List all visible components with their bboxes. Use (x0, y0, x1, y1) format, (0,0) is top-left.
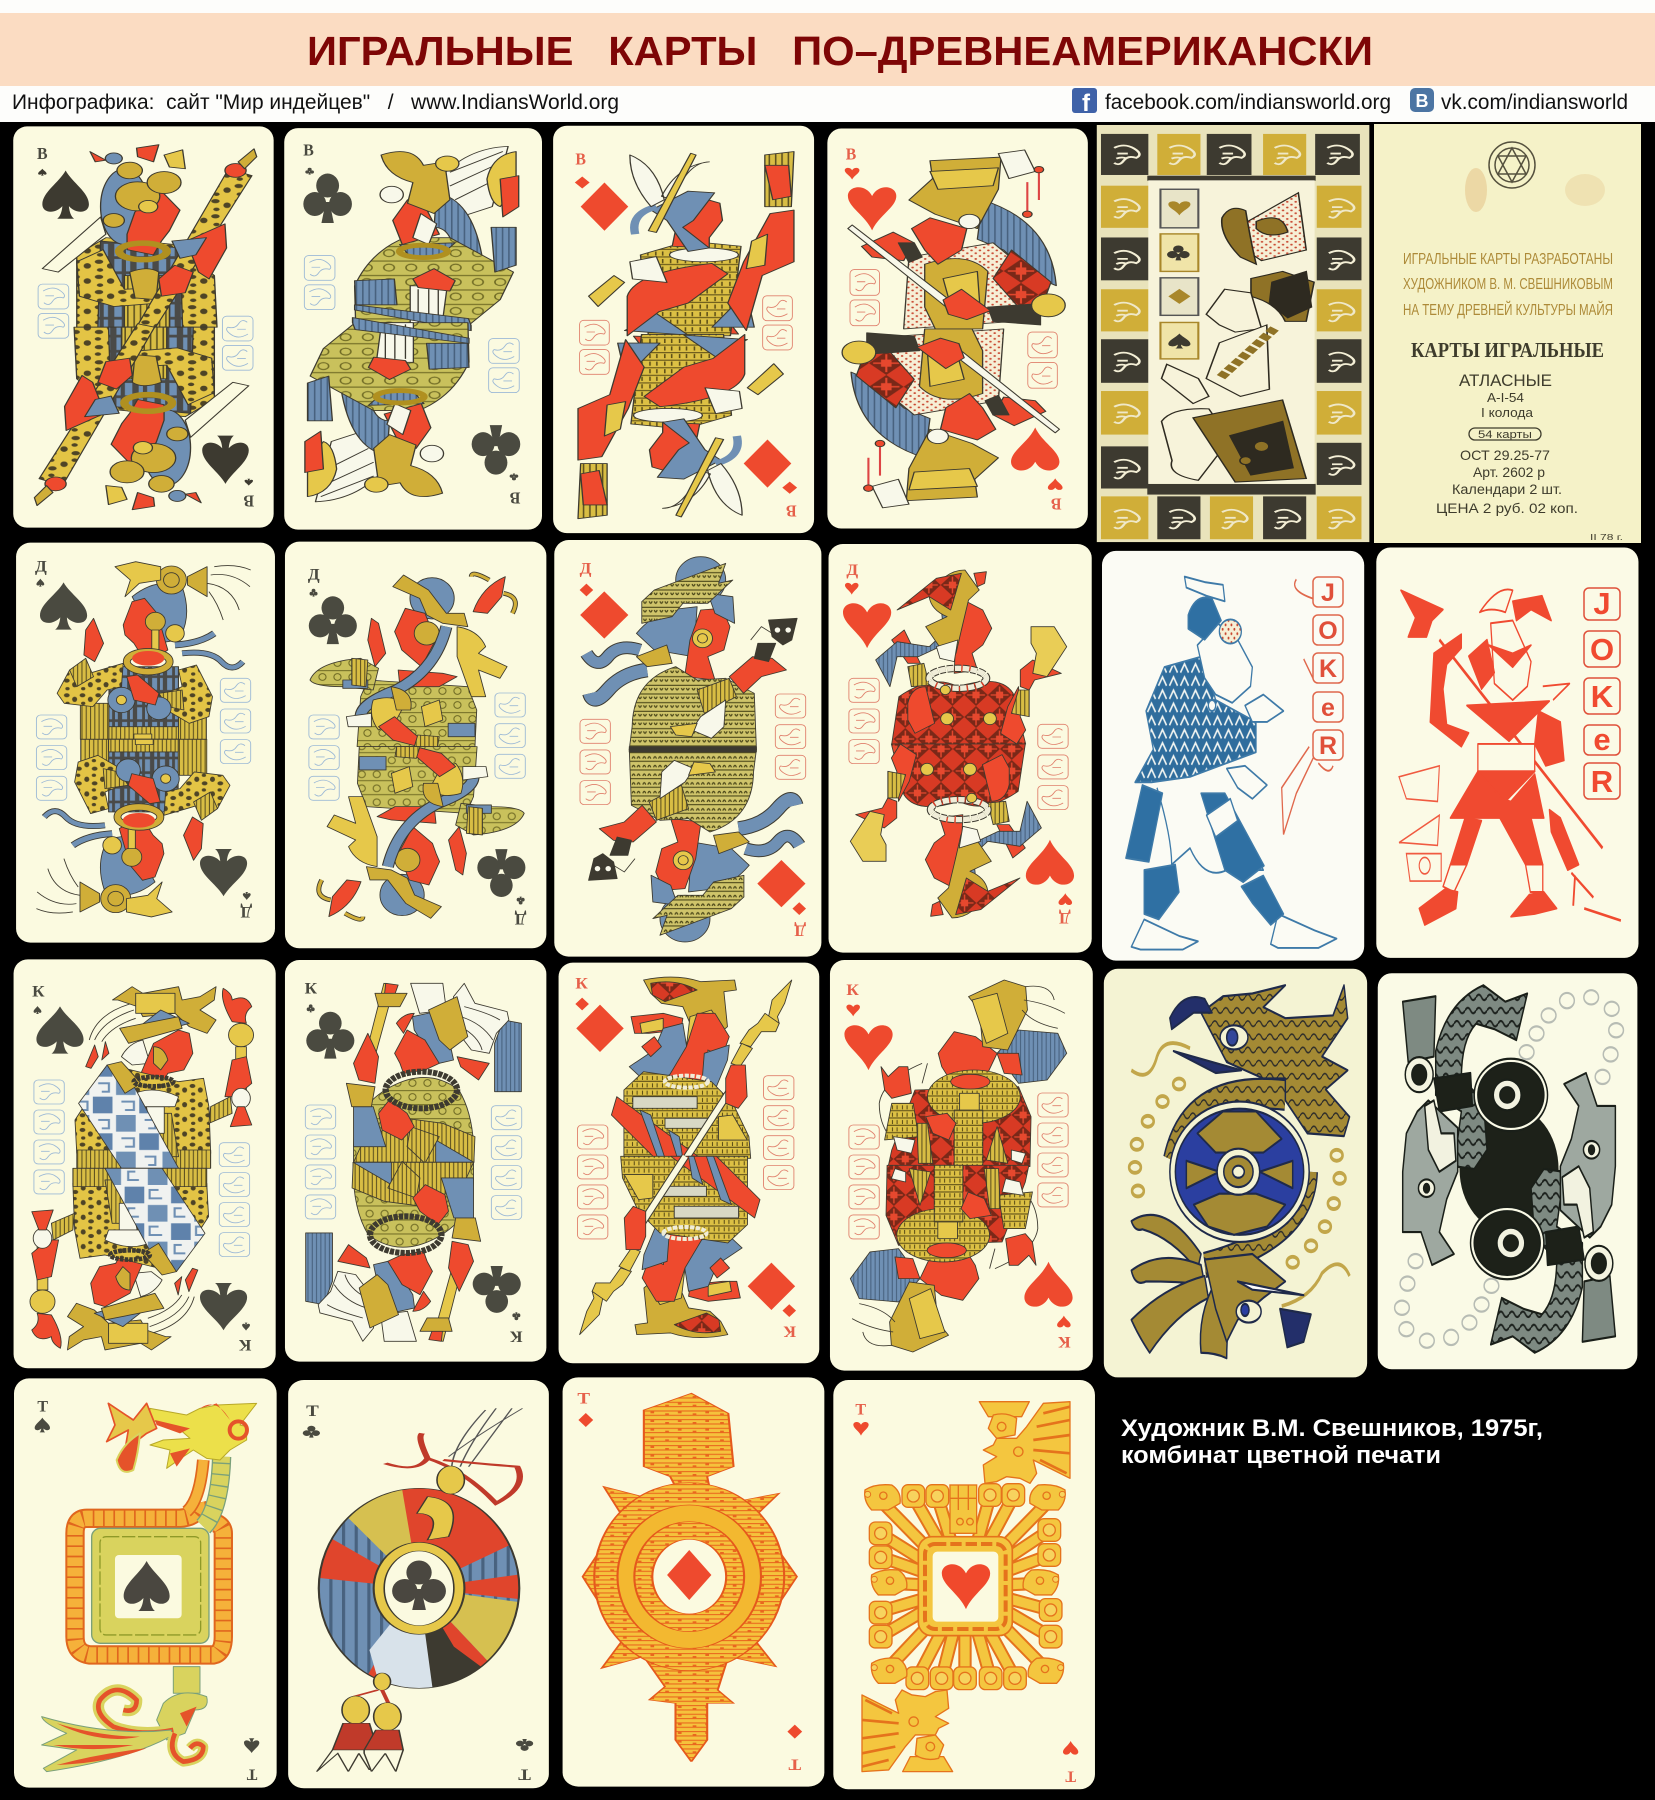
product title: КАРТЫ ИГРАЛЬНЫЕ (1411, 338, 1604, 362)
mirrored lower half (589, 694, 806, 942)
upper half of queen of diamonds (580, 557, 797, 805)
gold dots (1129, 1078, 1345, 1268)
rank and pips (577, 1390, 802, 1773)
icon: vk (1410, 88, 1434, 112)
rank and pips: Д (846, 561, 859, 579)
product details: А-I-54 (1487, 391, 1524, 405)
figure (75, 987, 254, 1168)
tassels (317, 1690, 403, 1772)
top hatched block with mask (950, 1485, 977, 1533)
glyph column (34, 1080, 64, 1194)
product details: I колода (1481, 406, 1533, 420)
rank and pips (853, 1401, 1078, 1784)
knobs (869, 1484, 1062, 1690)
title band (0, 13, 1655, 86)
seated figure (1162, 193, 1314, 482)
upper half of jack of spades (37, 144, 257, 338)
rank and pips (845, 144, 896, 230)
mirrored lower half (580, 1076, 796, 1341)
central disc (1460, 1106, 1559, 1232)
rank and pips (308, 565, 357, 644)
rank and pips: Т (37, 1398, 48, 1415)
serpent neck (203, 1457, 222, 1527)
inner panel with figure (1148, 180, 1315, 484)
card: jack of hearts (827, 129, 1088, 529)
card: blue joker (1102, 551, 1364, 961)
lower bird (862, 1690, 953, 1772)
tail plumes (1131, 1215, 1234, 1358)
product details: ЦЕНА 2 руб. 02 коп. (1436, 501, 1578, 516)
artist note: комбинат цветной печати (1121, 1442, 1441, 1469)
card: jack of diamonds (553, 126, 814, 533)
glyph column (849, 678, 879, 764)
rank and pips (37, 144, 89, 219)
plume and cord (385, 1408, 522, 1503)
stains (1465, 168, 1605, 212)
vk link: vk.com/indiansworld (1441, 91, 1628, 114)
product details: Арт. 2602 р (1473, 465, 1545, 480)
joker letters: O (1318, 617, 1338, 645)
glyph column (580, 320, 609, 374)
serpent head (150, 1403, 257, 1468)
joker letters (1584, 586, 1620, 799)
rank and pips (35, 1398, 259, 1782)
glyph column (850, 270, 880, 326)
joker letters: K (1591, 679, 1614, 714)
emblem (1489, 142, 1535, 188)
figure (611, 977, 792, 1158)
rank and pips: К (305, 979, 317, 997)
knot medallion (374, 1466, 464, 1690)
rank and pips: В (575, 150, 586, 168)
icon: facebook: f (1082, 90, 1091, 117)
panel: card box front (1097, 125, 1369, 542)
mirrored lower half (34, 316, 254, 510)
design credit lines (1403, 251, 1613, 319)
rank and pips: Д (308, 565, 320, 583)
mirrored lower half (319, 693, 526, 928)
upper half of queen of hearts (843, 561, 1067, 764)
rank and pips: Т (1065, 1767, 1076, 1784)
rank and pips: Т (306, 1402, 319, 1420)
medallion disc (320, 1488, 518, 1688)
mirrored lower half (578, 296, 797, 520)
product details: Календари 2 шт. (1452, 482, 1562, 497)
central square with heart (918, 1537, 1012, 1636)
rank and pips: К (846, 981, 859, 999)
joker letters (1313, 577, 1343, 760)
blue figure (1126, 577, 1337, 950)
upper half of queen of clubs (308, 565, 515, 800)
figure (310, 574, 515, 747)
panel: card box back (1374, 124, 1641, 543)
rank and pips (35, 557, 87, 630)
card: ace of clubs (288, 1380, 549, 1788)
figure (586, 557, 797, 749)
product details: АТЛАСНЫЕ (1459, 371, 1552, 390)
joker letters: K (1319, 655, 1337, 683)
figure (355, 146, 519, 331)
glyph column (305, 1105, 336, 1219)
card: ace of diamonds (563, 1377, 824, 1787)
icon: vk: В (1416, 91, 1428, 111)
rank and pips (303, 141, 352, 223)
glyph column (38, 284, 69, 338)
joker letters: J (1321, 579, 1335, 607)
joker letters: R (1591, 764, 1613, 799)
mirrored lower half (305, 318, 520, 507)
center ring with club (374, 1542, 464, 1634)
card: king of spades (14, 959, 276, 1368)
mirrored lower half (850, 1093, 1073, 1352)
rank and pips (843, 561, 891, 648)
upper half of king of hearts (844, 980, 1067, 1239)
rank and pips: В (303, 141, 314, 160)
upper half of jack of clubs (303, 141, 519, 331)
artist note: Художник В.М. Свешников, 1975г, (1121, 1415, 1543, 1442)
card: gold dragon back (1104, 969, 1367, 1377)
figure (848, 150, 1065, 329)
upper half of king of diamonds (575, 974, 792, 1239)
small suit tiles (1160, 189, 1198, 359)
glyph column (36, 715, 67, 800)
rank and pips: Т (788, 1755, 801, 1773)
rank and pips: Д (35, 557, 47, 576)
card: king of diamonds (559, 963, 819, 1363)
joker letters: J (1593, 586, 1611, 621)
title: ИГРАЛЬНЫЕ КАРТЫ ПО–ДРЕВНЕАМЕРИКАНСКИ (307, 28, 1373, 74)
pale dots (1519, 990, 1623, 1084)
rank and pips (303, 1402, 533, 1783)
upper half of queen of spades (35, 557, 251, 800)
rank and pips: Д (580, 559, 592, 577)
card: jack of clubs (284, 128, 542, 530)
mirrored lower half (36, 678, 252, 921)
serpent frame (42, 1403, 257, 1772)
rank and pips: Т (577, 1390, 590, 1407)
card: jack of spades (13, 126, 274, 528)
rank and pips (575, 974, 624, 1052)
card: king of clubs (285, 960, 546, 1362)
joker letters: R (1319, 732, 1337, 760)
rank and pips: В (846, 144, 856, 163)
upper half of jack of hearts (845, 144, 1065, 329)
upper half of king of spades (32, 982, 254, 1194)
icon: facebook (1072, 88, 1097, 117)
header strip (0, 0, 1655, 122)
rank and pips (575, 150, 628, 231)
product details: 54 карты (1478, 429, 1532, 441)
facebook link: facebook.com/indiansworld.org (1105, 91, 1391, 114)
figure (589, 152, 794, 336)
figure (879, 980, 1067, 1167)
rank and pips (32, 982, 84, 1054)
card: queen of clubs (285, 542, 546, 948)
upper half of king of clubs (305, 979, 521, 1219)
rank and pips: В (37, 144, 48, 163)
credit line: Инфографика: сайт "Мир индейцев" / www.IndiansWorld.org (12, 91, 619, 114)
rank and pips (844, 981, 893, 1070)
figure (346, 983, 521, 1163)
mirrored lower half (850, 724, 1074, 927)
mirrored lower half (30, 1143, 251, 1354)
glyph column (580, 719, 610, 805)
glyph column (304, 256, 335, 310)
rank and pips: К (32, 982, 45, 1001)
sun spokes (880, 1497, 1050, 1678)
card: ace of spades (14, 1378, 277, 1788)
serpent tail (173, 1667, 200, 1693)
red figure (1401, 589, 1621, 925)
card: king of hearts (830, 960, 1093, 1371)
product details: II 78 г. (1590, 533, 1623, 542)
glyph tile border (1101, 134, 1361, 539)
mirrored lower half (306, 1106, 522, 1346)
joker letters: e (1321, 694, 1335, 722)
jaguar heads (865, 1485, 1065, 1683)
card: ace of hearts (833, 1380, 1095, 1789)
artist note (1121, 1415, 1543, 1469)
product details: ОСТ 29.25-77 (1460, 447, 1550, 463)
joker letters: O (1590, 632, 1614, 667)
card: grey dragon back (1378, 973, 1637, 1369)
card: queen of spades (16, 543, 275, 943)
sun disc ornament (583, 1393, 797, 1762)
rank and pips: Т (855, 1401, 866, 1418)
figure (42, 145, 257, 331)
upper half of grey dragon (1403, 985, 1623, 1265)
card: red joker (1376, 548, 1638, 958)
glyph column (849, 1125, 879, 1239)
joker letters: e (1593, 722, 1611, 757)
rank and pips: Т (518, 1765, 531, 1783)
card: queen of hearts (829, 544, 1092, 953)
product details (1436, 371, 1623, 542)
gold whiskers (1131, 1043, 1350, 1306)
glyph column (309, 715, 339, 800)
dragon body (1131, 985, 1350, 1358)
feather ornament (1282, 579, 1333, 834)
glyph column (577, 1125, 608, 1239)
upper bird (979, 1402, 1070, 1483)
upper half of jack of diamonds (575, 150, 794, 374)
figure (876, 570, 1067, 744)
rank and pips (580, 559, 628, 639)
mirrored lower half (1395, 1073, 1615, 1353)
rank and pips (305, 979, 354, 1059)
rank and pips: Т (246, 1765, 257, 1782)
mirrored lower half (842, 329, 1063, 514)
card: queen of diamonds (554, 540, 821, 957)
joker glyphs (1399, 766, 1441, 881)
rank and pips: К (575, 974, 588, 992)
figure (57, 562, 251, 739)
